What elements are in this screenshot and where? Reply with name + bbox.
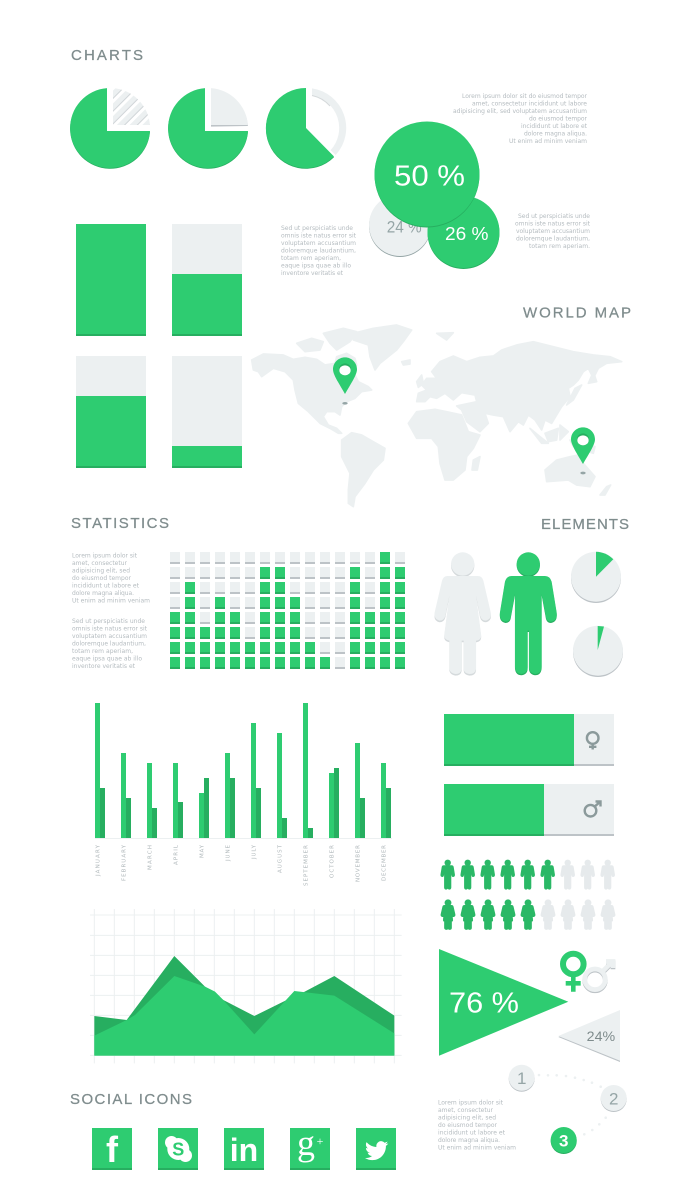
icon: facebook — [92, 1128, 132, 1170]
text block: bubble left: Sed ut perspiciatis unde — [281, 225, 353, 232]
text block: statistics intro: dolore magna aliqua. — [72, 590, 134, 597]
month labels: AUGUST — [277, 844, 283, 873]
text block: bottom: Ut enim ad minim veniam — [438, 1144, 516, 1152]
bubble: 24 percent — [369, 194, 431, 257]
text block: statistics intro — [72, 552, 150, 604]
text block: bubble left: totam rem aperiam, — [281, 255, 341, 262]
text block: bubble left: eaque ipsa quae ab illo — [281, 262, 351, 270]
icon: google plus — [290, 1123, 330, 1170]
month labels: MARCH — [147, 845, 153, 870]
text block: bubble right: Sed ut perspiciatis unde — [518, 213, 590, 220]
heading: elements: ELEMENTS — [541, 516, 629, 533]
bubble: 50 percent — [374, 122, 480, 228]
icon: woman figure — [434, 552, 491, 676]
month labels: APRIL — [173, 844, 179, 865]
icon: linkedin — [224, 1128, 264, 1170]
month labels: SEPTEMBER — [303, 845, 309, 886]
text block: bubble left: doloremque laudantium, — [281, 248, 356, 254]
text block: bubble left: voluptatem accusantium — [281, 240, 356, 247]
triangle: 76 percent — [439, 949, 568, 1056]
triangle: 24 percent: 24% — [587, 1028, 615, 1044]
text block: bubble left: omnis iste natus error sit — [281, 232, 357, 240]
heading: social icons: SOCIAL ICONS — [70, 1091, 192, 1108]
pictogram row: men — [441, 860, 615, 889]
step 3: 3 — [559, 1131, 568, 1150]
text block: bottom: incididunt ut labore et — [438, 1130, 506, 1136]
text block: top right: Lorem ipsum dolor sit do eiusmod tempor — [462, 93, 588, 100]
text block: bottom: do eiusmod tempor — [438, 1122, 498, 1129]
text block: top right: adipisicing elit, sed voluptatem accusantium — [453, 108, 587, 115]
text block: top right: dolore magna aliqua. — [524, 130, 587, 138]
text block: bubble right: totam rem aperiam. — [529, 243, 590, 250]
series: dark — [94, 956, 394, 1056]
series: light — [94, 976, 394, 1056]
gender bar: female — [444, 714, 614, 766]
text block: bottom: Lorem ipsum dolor sit — [438, 1100, 504, 1106]
text block: statistics intro: Ut enim ad minim veniam — [72, 598, 150, 604]
bar: two thirds — [76, 356, 146, 468]
text block: statistics intro: adipisicing elit, sed — [72, 568, 130, 574]
text block: top right: do eiusmod tempor — [529, 116, 588, 122]
bar: full — [76, 224, 146, 336]
text block: bubble right: doloremque laudantium, — [516, 236, 590, 242]
light bars — [95, 703, 386, 838]
text block: statistics detail: Sed ut perspiciatis unde — [72, 618, 145, 625]
small pie: upper — [571, 552, 621, 603]
dark bars — [100, 768, 391, 838]
triangle: 76 percent: 76 % — [449, 988, 519, 1020]
icon: facebook: f — [106, 1129, 119, 1170]
pie chart: ring segment — [266, 88, 346, 169]
text block: bubble left — [281, 225, 357, 277]
icon: man figure — [500, 552, 557, 675]
text block: top right: incididunt ut labore et — [521, 123, 588, 130]
small pie: lower — [573, 626, 623, 677]
heading: world map: WORLD MAP — [523, 304, 631, 322]
text block: bottom: dolore magna aliqua. — [438, 1137, 500, 1144]
icon: female symbol large — [563, 954, 584, 992]
step 2: 2 — [609, 1089, 618, 1108]
icon: male symbol — [585, 802, 600, 816]
icon: google plus: + — [317, 1134, 324, 1148]
bar chart: monthly — [95, 703, 392, 886]
month labels: NOVEMBER — [355, 845, 361, 882]
month labels: FEBRUARY — [121, 844, 127, 881]
text block: statistics detail: omnis iste natus error sit — [72, 626, 148, 632]
bar: low — [172, 356, 242, 468]
icon: twitter — [356, 1128, 396, 1170]
step 2 — [601, 1085, 627, 1112]
heading: statistics: STATISTICS — [71, 515, 169, 532]
area chart — [90, 909, 402, 1063]
month labels: DECEMBER — [381, 845, 387, 881]
step 3 — [551, 1127, 577, 1154]
pie chart: hatched quarter — [70, 88, 150, 169]
text block: bubble right: omnis iste natus error sit — [515, 220, 591, 228]
text block: statistics detail: inventore veritatis et — [72, 663, 136, 670]
icon: male symbol large — [585, 962, 613, 991]
step 1 — [509, 1065, 535, 1092]
text block: statistics intro: amet, consectetur — [72, 560, 128, 567]
text block: statistics detail: voluptatem accusantium — [72, 633, 147, 640]
pictogram row: women — [441, 900, 615, 929]
icon: linkedin: in — [230, 1132, 258, 1168]
text block: statistics intro: Lorem ipsum dolor sit — [72, 552, 138, 560]
bubble: 50 percent: 50 % — [394, 161, 465, 193]
bubble: 24 percent: 24 % — [387, 217, 422, 236]
bubble: 26 percent — [428, 196, 500, 269]
month labels — [95, 844, 387, 886]
map pin: north america — [333, 357, 357, 405]
text block: bubble left: inventore veritatis et — [281, 270, 344, 277]
pie chart: solid quarter — [168, 88, 248, 169]
text block: statistics intro: incididunt ut labore et — [72, 582, 140, 590]
text block: bottom — [438, 1100, 516, 1152]
text block: statistics detail: doloremque laudantium, — [72, 640, 146, 648]
text block: bubble right — [515, 213, 591, 250]
text block: statistics intro: do eiusmod tempor — [72, 575, 132, 582]
dotted path — [538, 1074, 607, 1136]
text block: statistics detail: eaque ipsa quae ab illo — [72, 656, 142, 662]
map pin: australia — [571, 427, 595, 474]
month labels: OCTOBER — [329, 845, 335, 878]
axis — [95, 838, 392, 839]
step 1: 1 — [517, 1069, 526, 1088]
text block: bottom: adipisicing elit, sed — [438, 1114, 496, 1122]
bubble: 26 percent: 26 % — [445, 223, 488, 244]
waffle chart — [170, 552, 405, 672]
text block: top right — [453, 93, 588, 145]
month labels: MAY — [199, 844, 205, 858]
triangle: 24 percent — [558, 1010, 620, 1062]
text block: bottom: amet, consectetur — [438, 1107, 494, 1114]
icon: google plus: g — [297, 1123, 315, 1163]
bubble chart — [369, 122, 500, 269]
text block: bubble right: voluptatem accusantium — [516, 228, 590, 235]
text block: top right: Ut enim ad minim veniam — [509, 138, 587, 145]
month labels: JUNE — [225, 844, 231, 862]
text block: statistics detail — [72, 618, 148, 670]
world map — [252, 325, 622, 507]
icon: skype: S — [172, 1140, 184, 1160]
heading: charts: CHARTS — [71, 47, 143, 64]
text block: top right: amet, consectetur incididunt ut labore — [472, 100, 587, 108]
icon: skype — [158, 1128, 198, 1170]
icon: female symbol — [587, 732, 598, 750]
gender bar: male — [444, 784, 614, 836]
bar: half — [172, 224, 242, 336]
month labels: JULY — [251, 844, 257, 860]
month labels: JANUARY — [95, 844, 101, 877]
fill bars — [76, 224, 242, 468]
text block: statistics detail: totam rem aperiam, — [72, 648, 133, 655]
